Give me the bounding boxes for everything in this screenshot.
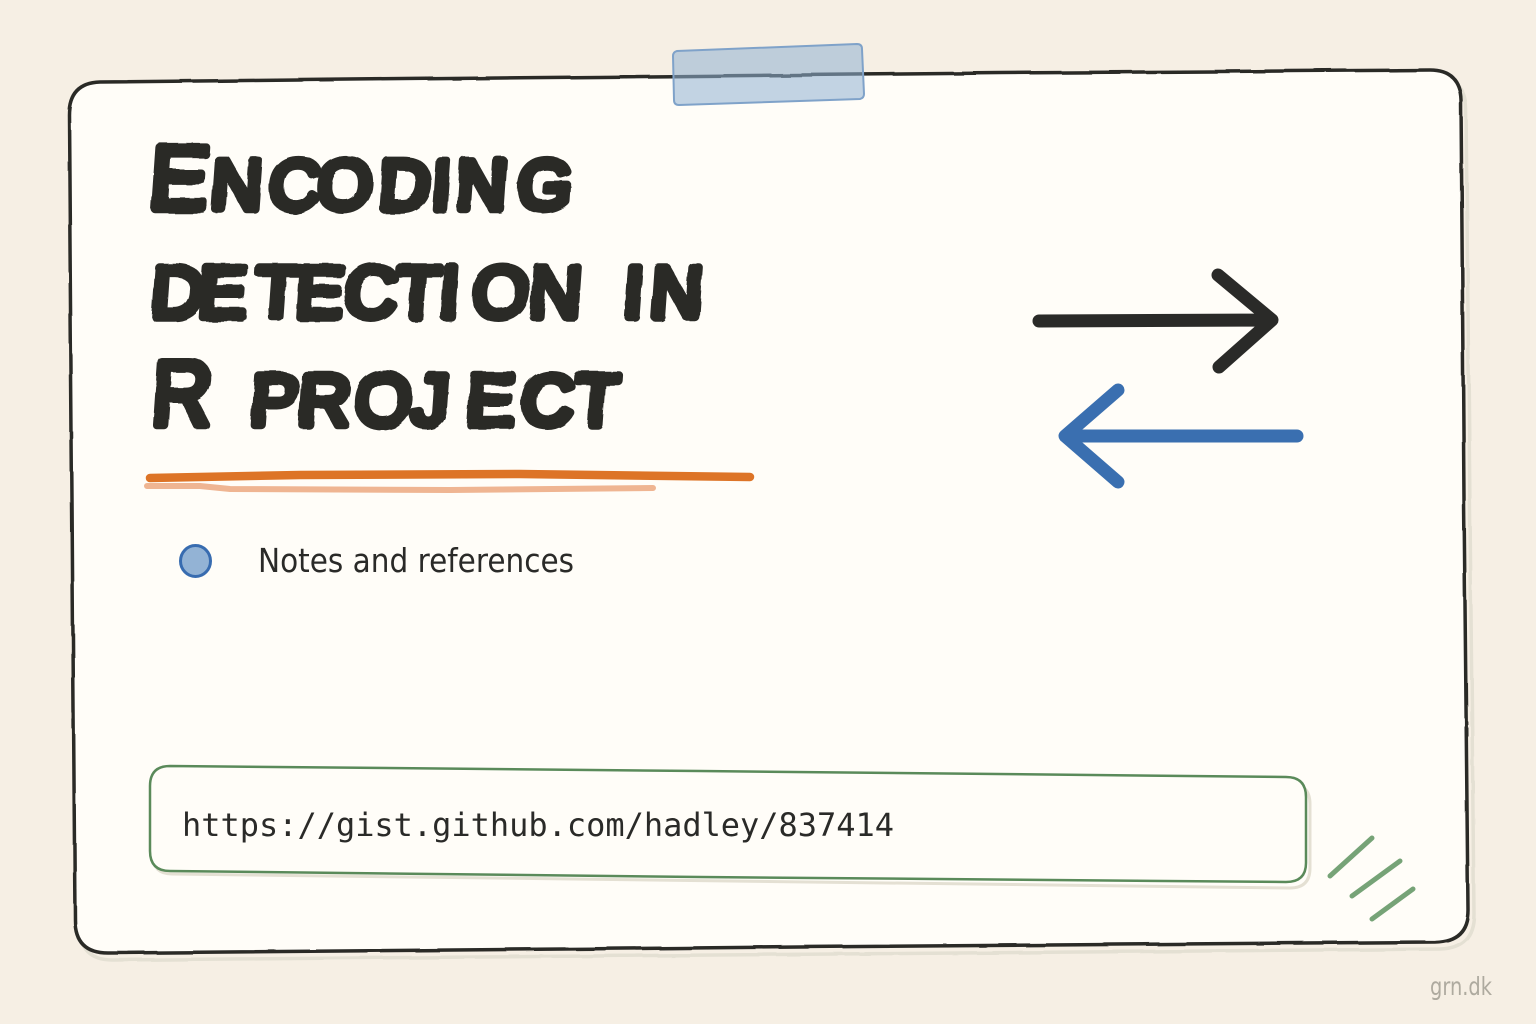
title line 1: NCODING (209, 146, 575, 224)
icon: blue arrow pointing left (1065, 390, 1297, 482)
title line 3: PROJECT (248, 361, 621, 441)
decorative green hatch marks (1330, 838, 1413, 919)
title line 1: E (147, 127, 213, 228)
icon: black arrow pointing right (1039, 275, 1272, 367)
title line 3 (149, 342, 621, 445)
title line 1 (147, 127, 575, 228)
panel: main card (69, 70, 1468, 953)
watermark: grn.dk (1430, 972, 1492, 1001)
title line 3: R (149, 342, 216, 445)
tape (673, 44, 864, 105)
title line 2: DETECTION IN (149, 253, 705, 333)
title (147, 127, 705, 445)
bullet dot (180, 546, 210, 576)
url box shadow (153, 772, 1310, 888)
url text: https://gist.github.com/hadley/837414 (182, 806, 894, 844)
title underline (147, 474, 750, 490)
card shadow (73, 76, 1474, 960)
url box (150, 766, 1306, 882)
bullet text: Notes and references (258, 541, 574, 580)
